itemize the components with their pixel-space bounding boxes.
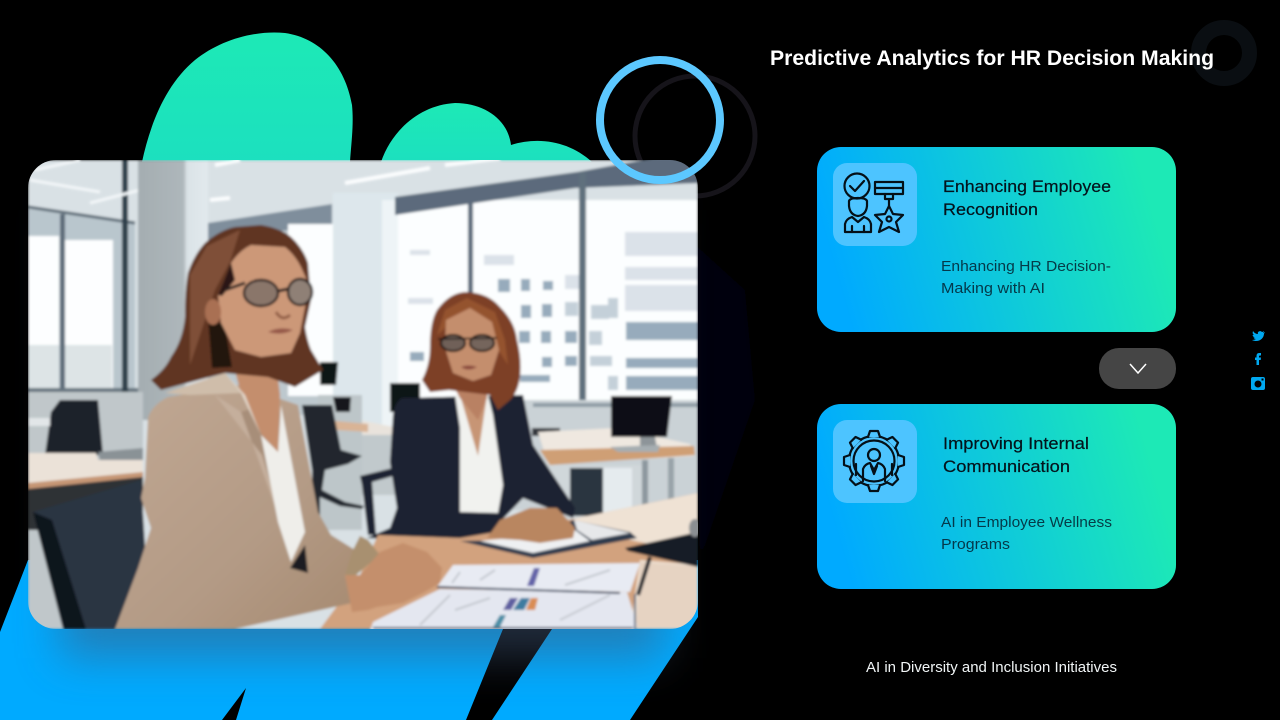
title: Predictive Analytics for HR Decision Making <box>770 47 1214 70</box>
second woman <box>367 292 575 542</box>
card body: Enhancing HR Decision- <box>941 258 1111 275</box>
card: Enhancing Employee Recognition: Recognition <box>943 200 1038 219</box>
office background <box>28 150 698 629</box>
icon: person inside gear <box>844 431 904 491</box>
green blobs <box>142 32 592 162</box>
card: Improving Internal Communication: Communication <box>943 457 1070 476</box>
card: Improving Internal Communication: Programs <box>941 536 1010 553</box>
back woman's chair <box>360 468 393 535</box>
icon: employee with star award <box>844 174 903 232</box>
buildings seen through windows <box>408 232 698 390</box>
footer text: AI in Diversity and Inclusion Initiatives <box>866 659 1117 676</box>
foreground desk <box>320 493 698 629</box>
icon: facebook <box>1255 353 1261 365</box>
first woman <box>115 225 380 629</box>
card: Enhancing Employee Recognition: Making with AI <box>941 280 1045 297</box>
photo shadow <box>60 210 665 658</box>
card body: AI in Employee Wellness <box>941 514 1112 531</box>
icon tile: communication <box>833 420 917 503</box>
clipboard <box>460 508 637 558</box>
card heading: Improving Internal <box>943 434 1089 453</box>
chevron button <box>1099 348 1176 389</box>
dark ring <box>635 76 755 196</box>
social icons <box>1251 331 1265 390</box>
card: Enhancing Employee Recognition <box>817 147 1176 332</box>
card: Improving Internal Communication <box>817 404 1176 589</box>
front chair <box>33 480 146 629</box>
keyboard and mouse <box>625 519 701 567</box>
faint ghost shape right of photo <box>690 240 755 560</box>
icon: twitter <box>1252 331 1265 341</box>
icon: instagram <box>1251 377 1265 390</box>
blue background shape <box>0 560 698 720</box>
photo: two women in an office <box>28 150 701 631</box>
light blue ring <box>600 60 720 180</box>
left back desk, chair and floor <box>28 392 143 629</box>
top right dark ring <box>1198 28 1250 78</box>
hand holding pen <box>345 543 442 612</box>
card heading: Enhancing Employee <box>943 177 1111 196</box>
documents <box>370 557 650 631</box>
back desks and monitors <box>302 362 698 530</box>
icon tile: recognition <box>833 163 917 246</box>
